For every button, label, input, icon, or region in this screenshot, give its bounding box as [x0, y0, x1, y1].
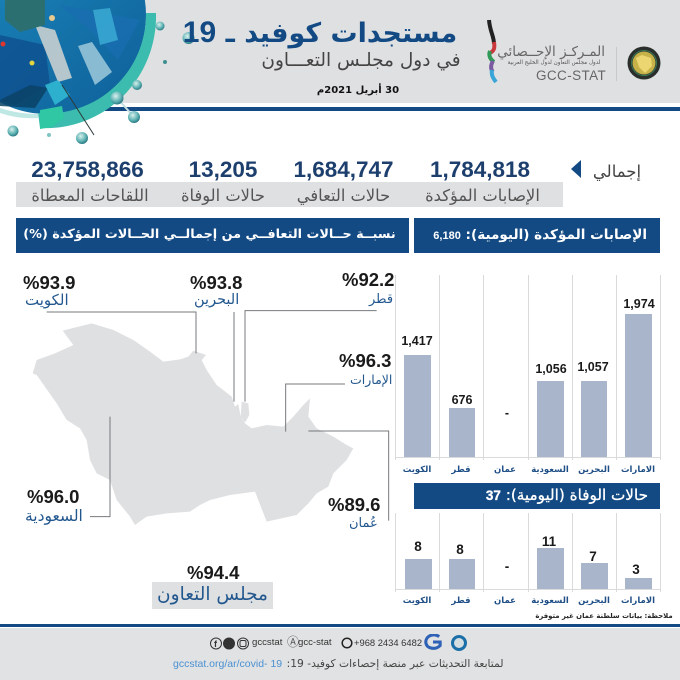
- footer band: [0, 628, 680, 680]
- bar chart: daily confirmed: قطر: [451, 465, 471, 475]
- icon: G logo: [424, 634, 442, 650]
- icon: left triangle: [571, 160, 581, 178]
- Bahrain rate: [190, 272, 242, 308]
- stat: confirmed cases: الإصابات المؤكدة: [425, 186, 540, 205]
- Qatar rate: [342, 269, 394, 307]
- stat: deaths: 13,205: [189, 157, 257, 182]
- bar chart: daily confirmed: -: [505, 406, 509, 420]
- Bahrain rate: %93.8: [190, 272, 242, 293]
- icon: round seal: [451, 635, 467, 651]
- follow-up link text: gccstat.org/ar/covid- 19 لمتابعة التحديثات عبر منصة إحصاءات كوفيد- 19:: [173, 657, 503, 670]
- Oman rate: عُمان: [349, 516, 378, 531]
- bar chart: daily deaths: قطر: [451, 596, 471, 606]
- stat: recoveries: 1,684,747: [293, 157, 394, 182]
- GCC value: %94.4: [187, 562, 239, 583]
- subtitle: في دول مجلـس التعـــاون: [261, 50, 461, 71]
- bar chart: daily deaths: 7: [589, 549, 597, 564]
- stat: confirmed cases: [425, 157, 540, 205]
- heading: recovery rate: نسبــة حــالات التعافــي من إجمالــي الحــالات المؤكدة (%): [23, 227, 396, 242]
- heading: daily confirmed: الإصابات المؤكدة (اليومية): 6,180: [433, 227, 647, 243]
- stat: confirmed cases: 1,784,818: [430, 157, 530, 182]
- bar chart: daily deaths: الامارات: [621, 596, 655, 606]
- grey label band: [16, 182, 563, 207]
- footer rule: [0, 624, 680, 627]
- stat: vaccines: 23,758,866: [31, 157, 144, 182]
- icon: phone: [341, 638, 353, 648]
- heading: daily deaths: [414, 483, 660, 509]
- Oman rate: [328, 494, 380, 531]
- Kuwait rate: %93.9: [23, 272, 75, 293]
- stat: deaths: [181, 157, 265, 205]
- bar chart: daily deaths: [395, 513, 661, 606]
- bar chart: daily deaths: 8: [456, 542, 464, 557]
- bar chart: daily deaths: -: [505, 559, 509, 574]
- phone number: +968 2434 6482: [354, 637, 422, 648]
- small molecule near title: [182, 32, 194, 44]
- UAE rate: [339, 350, 392, 387]
- Saudi rate: السعودية: [25, 507, 83, 525]
- Oman rate: %89.6: [328, 494, 380, 515]
- map of GCC: [32, 310, 390, 525]
- Kuwait rate: [23, 272, 75, 309]
- icon: GCC emblem: [628, 46, 660, 80]
- Qatar rate: قطر: [369, 292, 393, 307]
- bar chart: daily confirmed: الامارات: [621, 465, 655, 475]
- date: 30 أبريل 2021م: [317, 85, 399, 96]
- leader lines: [47, 311, 389, 521]
- stat: recoveries: [293, 157, 394, 205]
- category labels: الكويت: [403, 465, 431, 475]
- bar chart: daily confirmed: 1,974: [623, 297, 655, 311]
- Saudi rate: [25, 486, 83, 525]
- header rule: [105, 107, 680, 111]
- map shape: [33, 323, 353, 525]
- logo divider: [616, 47, 617, 81]
- header band: [0, 0, 680, 103]
- bar chart: daily confirmed: عمان: [494, 465, 516, 475]
- title: مستجدات كوفيد ـ 19: [183, 16, 457, 49]
- logo GCC-STAT wordmark: GCC-STAT: [536, 68, 606, 83]
- Kuwait rate: الكويت: [25, 291, 69, 309]
- bar chart: daily confirmed: 1,057: [577, 360, 609, 374]
- bar chart: daily confirmed: [395, 275, 661, 475]
- values: 1,417: [401, 334, 433, 348]
- GCC label: مجلس التعاون: [157, 584, 268, 605]
- social handle: gccstat: [252, 637, 282, 648]
- UAE rate: الإمارات: [350, 372, 392, 387]
- label: total: إجمالي: [593, 162, 641, 181]
- note: ملاحظة: بيانات سلطنة عمان غير متوفرة: [535, 612, 673, 620]
- bar chart: daily deaths: عمان: [494, 596, 516, 606]
- social icons: [210, 638, 249, 650]
- heading: recovery rate: [16, 218, 409, 253]
- stat: vaccines: اللقاحات المعطاة: [31, 186, 149, 205]
- totals strip: [16, 157, 641, 207]
- bar chart: daily deaths: البحرين: [578, 596, 610, 606]
- bar chart: daily deaths: 11: [542, 534, 556, 549]
- bar chart: daily confirmed: 676: [452, 393, 472, 407]
- Bahrain rate: البحرين: [194, 292, 239, 308]
- header collage illustration: [0, 0, 167, 144]
- bar chart: daily confirmed: البحرين: [578, 465, 610, 475]
- bar chart: daily confirmed: السعودية: [531, 465, 569, 475]
- GCC rate: [152, 562, 273, 609]
- web handle: gcc-stat: [298, 637, 332, 648]
- stat: recoveries: حالات التعافي: [297, 186, 390, 205]
- bar chart: daily confirmed: 1,056: [535, 362, 567, 376]
- UAE rate: %96.3: [339, 350, 391, 371]
- icon: at: Ⓐ: [287, 635, 299, 649]
- logo ribbon: [487, 20, 498, 84]
- heading: daily confirmed: [414, 218, 660, 253]
- teal ring: [38, 13, 156, 128]
- logo Arabic name: المـركـز الإحــصائي: [497, 44, 605, 60]
- social icons: f: [214, 639, 218, 649]
- Saudi rate: %96.0: [27, 486, 79, 507]
- bar chart: daily deaths: السعودية: [531, 596, 569, 606]
- stat: vaccines: [31, 157, 149, 205]
- heading: daily deaths: حالات الوفاة (اليومية): 37: [486, 486, 648, 504]
- category labels: الكويت: [403, 596, 431, 606]
- Qatar rate: %92.2: [342, 269, 394, 290]
- logo Arabic subtitle: لدول مجلس التعاون لدول الخليج العربية: [508, 60, 600, 66]
- bar chart: daily deaths: 3: [632, 562, 640, 577]
- values: 8: [414, 539, 422, 554]
- stat: deaths: حالات الوفاة: [181, 186, 265, 205]
- logo: GCC-STAT: [487, 20, 606, 84]
